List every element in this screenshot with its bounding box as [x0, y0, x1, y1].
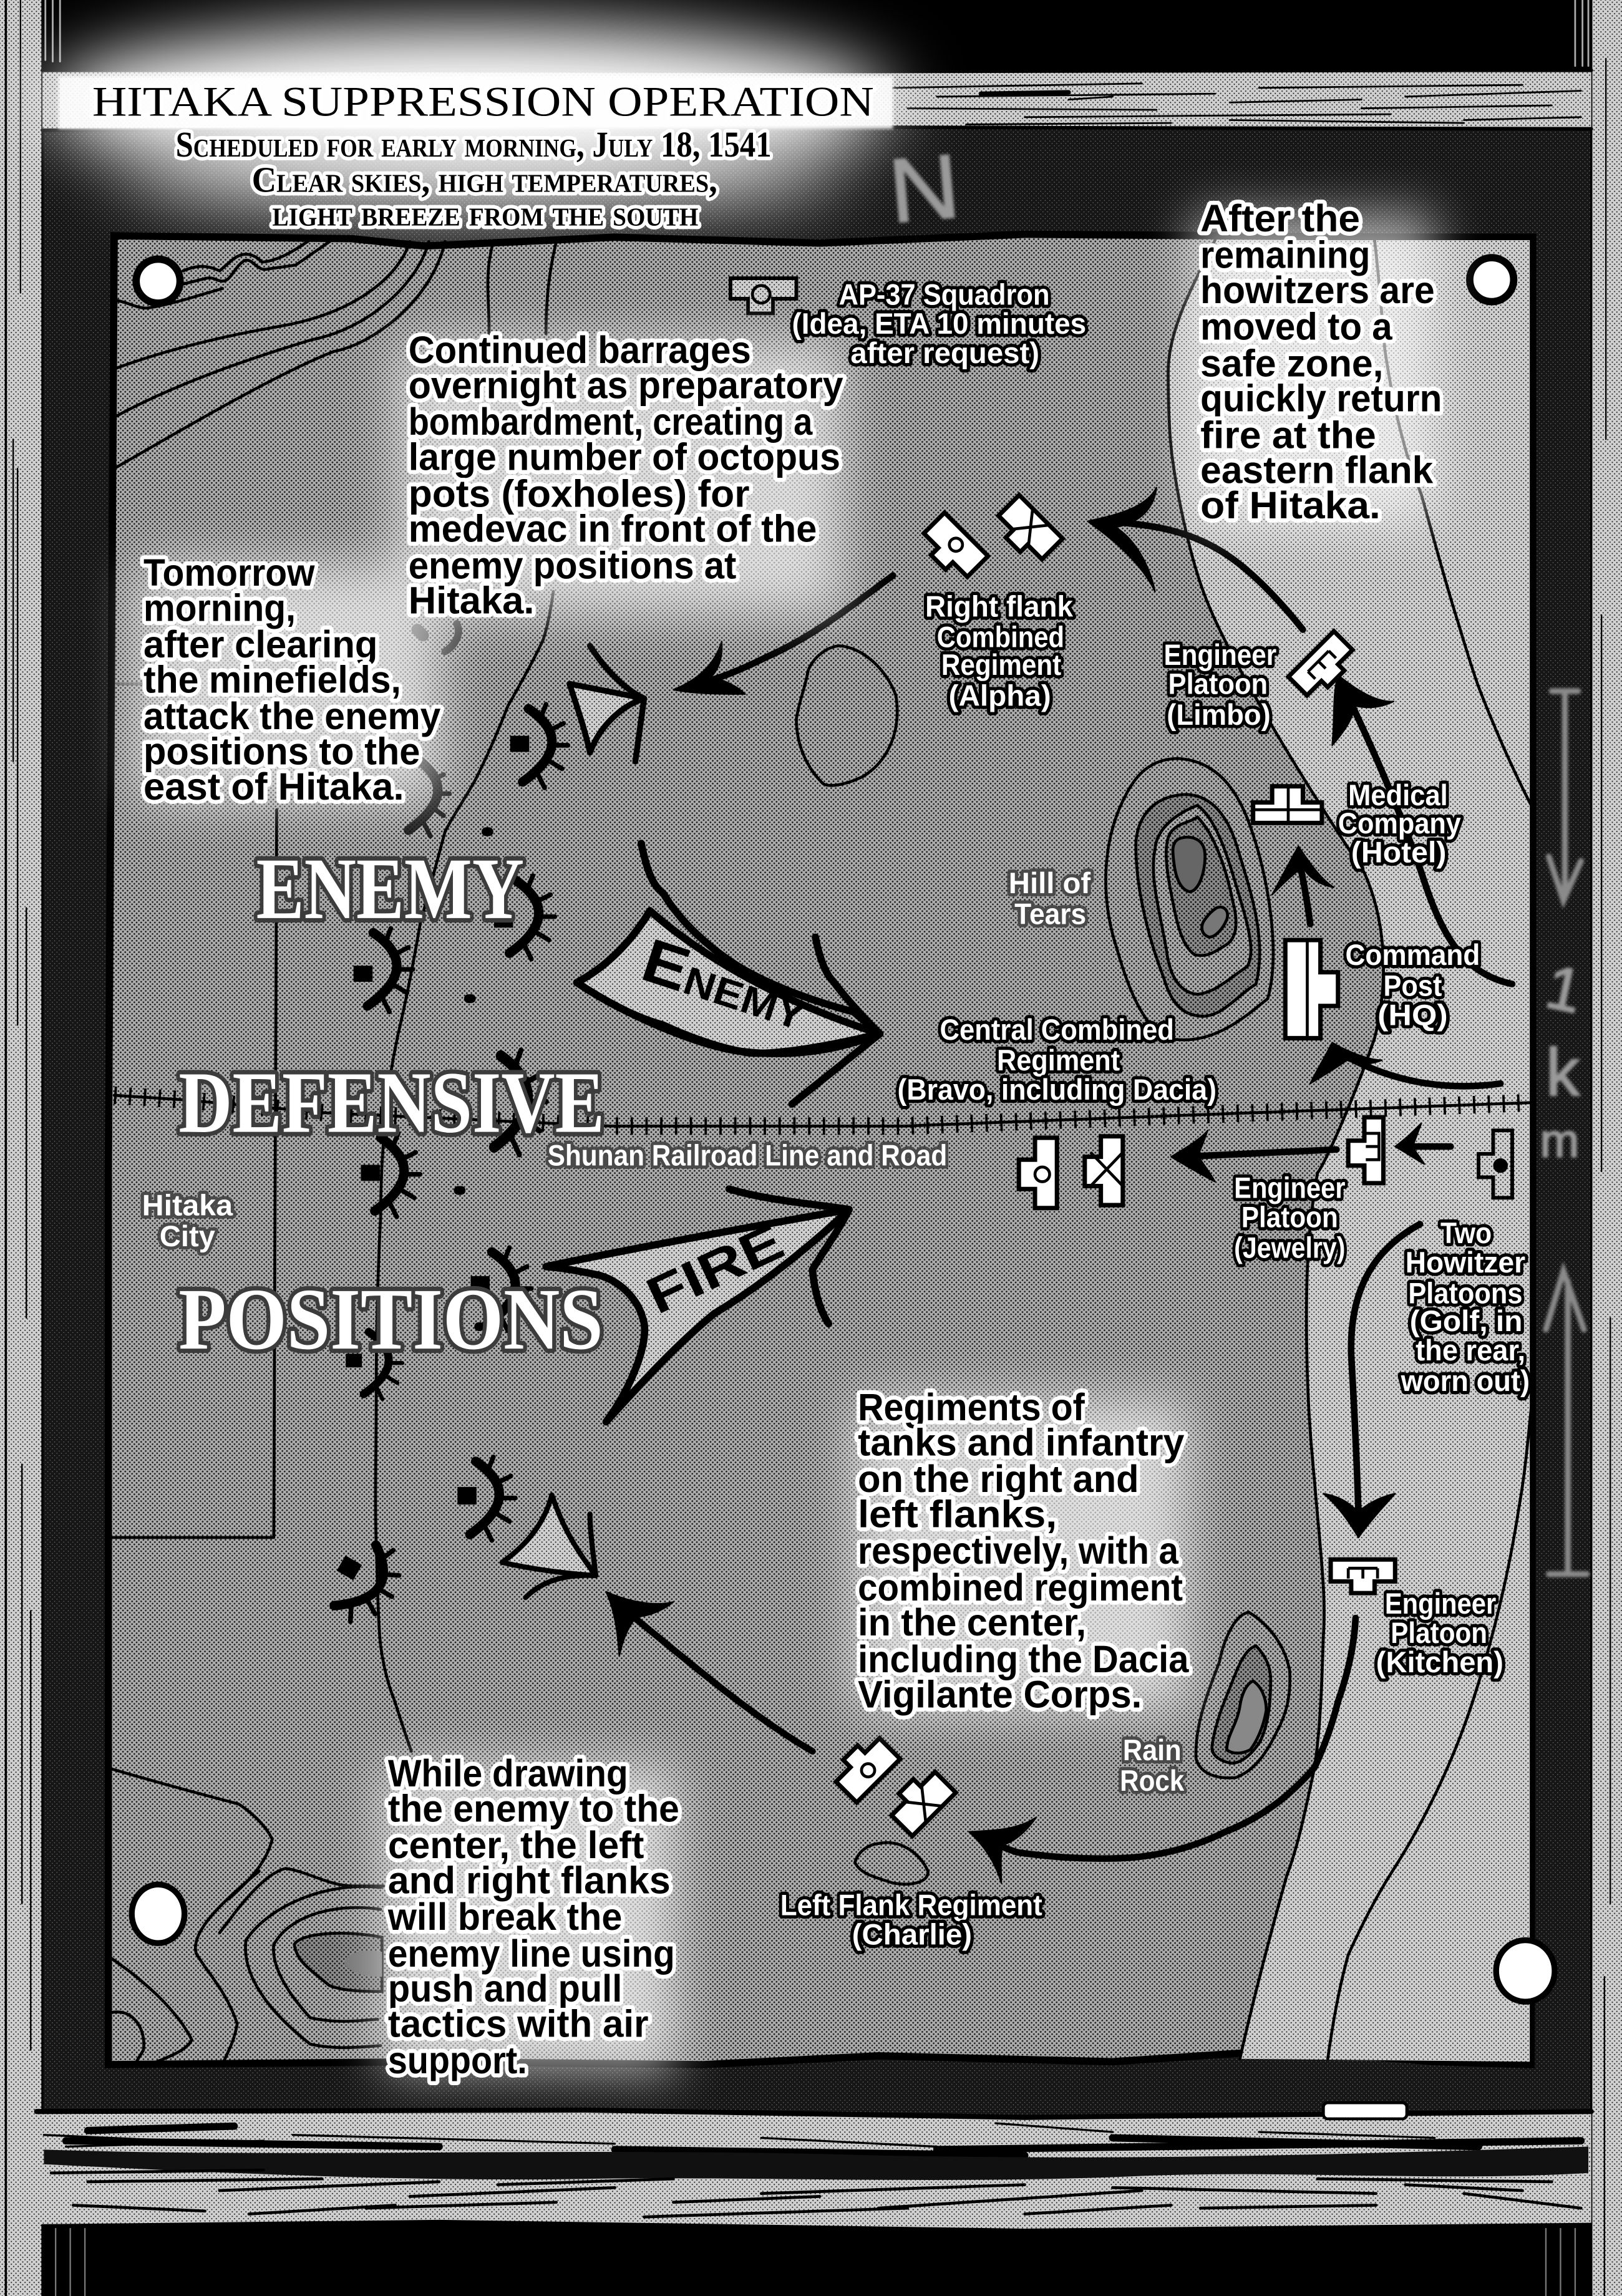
subtitle: schedule: Scheduled for early morning, July 18, 1541 [176, 124, 772, 165]
text block: regiment composition [858, 1386, 1189, 1715]
label: Rain Rock: Rock [1120, 1765, 1185, 1797]
text block: preparatory bombardment: bombardment, creating a [409, 400, 813, 443]
text block: push and pull tactics: the enemy to the [388, 1787, 679, 1829]
text block: regiment composition: tanks and infantry [858, 1421, 1184, 1463]
icon: right flank infantry unit [991, 495, 1062, 566]
text block: push and pull tactics: will break the [387, 1896, 622, 1938]
chalk ledge [37, 2110, 1591, 2229]
label: Right flank regiment [925, 590, 1074, 712]
label: Rain Rock [1120, 1734, 1185, 1797]
chalk scale: one kilometre: m [1540, 1115, 1579, 1167]
label: Engineer Platoon Jewelry: (Jewelry) [1234, 1232, 1345, 1264]
text block: howitzer return fire: fire at the [1200, 414, 1376, 456]
label: Hitaka City: Hitaka [142, 1189, 233, 1221]
left wooden post [0, 0, 42, 2296]
label: Rain Rock: Rain [1123, 1734, 1182, 1766]
big label: ENEMY: ENEMY [256, 841, 524, 937]
chalk scale: one kilometre: 1 [1540, 952, 1588, 1026]
eastern lowland [1168, 240, 1530, 2061]
text block: morning attack: Tomorrow [143, 551, 315, 594]
label: Engineer Platoon Limbo: Engineer [1164, 639, 1276, 671]
pin: bottom right [1496, 1940, 1555, 2002]
label: Hitaka City: City [160, 1220, 215, 1252]
icon: AP-37 squadron unit [731, 278, 797, 313]
chalk scale: one kilometre: k [1546, 1034, 1580, 1110]
label: Two Howitzer Platoons [1401, 1217, 1530, 1397]
label: Right flank regiment: Right flank [925, 590, 1074, 622]
icon: left flank infantry unit [885, 1765, 956, 1836]
text block: morning attack: positions to the [143, 730, 420, 772]
label: Command Post [1345, 939, 1480, 1031]
central small hill [797, 646, 897, 785]
text block: morning attack [143, 551, 440, 808]
label: Two Howitzer Platoons: Howitzer [1406, 1246, 1525, 1279]
text block: push and pull tactics: push and pull [388, 1967, 622, 2010]
label: Two Howitzer Platoons: the rear, [1416, 1334, 1525, 1367]
label: Two Howitzer Platoons: Platoons [1408, 1277, 1522, 1309]
icon: Jewelry engineer unit [1348, 1117, 1384, 1183]
Hitaka city boundary [111, 810, 277, 1538]
label: Central Combined Regiment: Regiment [997, 1044, 1120, 1077]
wood grain [66, 2126, 1581, 2156]
chalk scale: one kilometre [1540, 691, 1588, 1574]
label: Right flank regiment: (Alpha) [949, 680, 1051, 712]
label: Engineer Platoon Limbo [1164, 639, 1276, 731]
enemy positions: entrenchment markers [319, 624, 568, 1634]
text block: regiment composition: left flanks, [858, 1493, 1057, 1536]
text block: preparatory bombardment: Continued barrages [409, 329, 751, 371]
label: Engineer Platoon Kitchen: Platoon [1391, 1617, 1487, 1649]
west bank line [1168, 240, 1384, 2059]
banner word ENEMY: ENEMY [634, 926, 817, 1043]
label: AP-37 Squadron: AP-37 Squadron [839, 278, 1049, 311]
arrow: Jewelry to centre [1171, 1130, 1336, 1181]
text block: regiment composition: on the right and [858, 1458, 1139, 1500]
label: Two Howitzer Platoons: Two [1440, 1217, 1492, 1249]
label: Two Howitzer Platoons: worn out) [1401, 1365, 1530, 1397]
text block: preparatory bombardment: large number of octopus [409, 436, 840, 478]
map sheet [109, 235, 1533, 2065]
railroad line [114, 1095, 1532, 1126]
text block: regiment composition: including the Dacia [858, 1638, 1189, 1680]
contours: north-west [114, 239, 556, 468]
text block: regiment composition: combined regiment [858, 1566, 1183, 1609]
arrow: right flank to enemy [673, 576, 893, 694]
arrow: to HQ [1310, 1042, 1500, 1086]
text block: push and pull tactics: tactics with air [388, 2002, 649, 2045]
icon: howitzer unit [1479, 1130, 1512, 1198]
text block: morning attack: east of Hitaka. [143, 765, 404, 808]
text block: howitzer return fire: remaining [1200, 234, 1370, 276]
enemy front line [376, 591, 553, 1751]
arrow: HQ to Medical [1272, 846, 1334, 924]
label: Engineer Platoon Limbo: Platoon [1168, 668, 1268, 700]
left flank rock [855, 1843, 928, 1884]
label: Engineer Platoon Kitchen: (Kitchen) [1376, 1646, 1503, 1678]
text block: preparatory bombardment: overnight as preparatory [409, 364, 843, 407]
text block: regiment composition: respectively, with a [858, 1529, 1179, 1572]
text block: howitzer return fire [1200, 197, 1442, 526]
label: Hill of Tears [1009, 867, 1091, 930]
subtitle: wind: light breeze from the south [272, 193, 698, 234]
text block: preparatory bombardment: pots (foxholes) for [409, 472, 749, 515]
label: Command Post: (HQ) [1377, 999, 1448, 1031]
label: Hill of Tears: Hill of [1009, 867, 1091, 899]
right wooden post [1591, 0, 1622, 2296]
label: AP-37 Squadron: after request) [850, 337, 1039, 369]
text block: preparatory bombardment: medevac in front of the [409, 508, 817, 550]
text block: howitzer return fire: moved to a [1200, 306, 1393, 348]
text block: howitzer return fire: quickly return [1200, 377, 1442, 420]
text block: howitzer return fire: After the [1200, 197, 1360, 240]
label: Engineer Platoon Jewelry: Platoon [1241, 1201, 1338, 1233]
text block: howitzer return fire: safe zone, [1200, 342, 1384, 384]
label: Left Flank Regiment: Left Flank Regiment [780, 1889, 1042, 1922]
text block: howitzer return fire: of Hitaka. [1200, 484, 1381, 526]
label: Central Combined Regiment [897, 1014, 1216, 1106]
arrow: fire banner [546, 1189, 849, 1422]
label: Right flank regiment: Combined [937, 621, 1064, 654]
title block [92, 77, 874, 234]
Rain Rock contours [1196, 1612, 1290, 1778]
label: Medical Company: Company [1338, 807, 1461, 840]
text block: push and pull tactics: While drawing [388, 1752, 628, 1795]
arrow: left flank to enemy [606, 1592, 812, 1751]
east bank line, north [1374, 240, 1532, 805]
top beam [42, 70, 1591, 132]
big label: POSITIONS: POSITIONS [178, 1271, 603, 1368]
label: Two Howitzer Platoons: (Golf, in [1410, 1305, 1522, 1337]
label: Command Post: Post [1384, 969, 1442, 1002]
arrow: Kitchen to left flank [969, 1618, 1356, 1883]
label: Command Post: Command [1345, 939, 1480, 971]
label: Medical Company: (Hotel) [1351, 836, 1446, 869]
arrow: enemy south chevron [502, 1495, 596, 1597]
label: Left Flank Regiment [780, 1889, 1042, 1951]
label: AP-37 Squadron: (Idea, ETA 10 minutes [792, 308, 1086, 340]
label: AP-37 Squadron [792, 278, 1086, 369]
text block: push and pull tactics: enemy line using [388, 1932, 675, 1975]
label: railroad: Shunan Railroad Line and Road [548, 1140, 947, 1172]
label: Engineer Platoon Jewelry: Engineer [1234, 1171, 1345, 1204]
big label: DEFENSIVE: DEFENSIVE [178, 1055, 605, 1151]
text block: push and pull tactics: support. [388, 2039, 527, 2081]
text block: preparatory bombardment: enemy positions at [409, 544, 736, 586]
chalk compass letter N: N [885, 135, 964, 242]
pin: top left [136, 259, 180, 303]
text block: push and pull tactics: center, the left [388, 1824, 644, 1866]
label: Engineer Platoon Kitchen [1376, 1587, 1503, 1678]
icon: medical unit [1253, 787, 1322, 823]
text block: morning attack: attack the enemy [143, 695, 440, 737]
icon: chalk stick [1323, 2103, 1407, 2119]
panel: map [109, 235, 1533, 2065]
label: Left Flank Regiment: (Charlie) [852, 1919, 972, 1951]
label: Hitaka City [142, 1189, 233, 1252]
label: Engineer Platoon Kitchen: Engineer [1385, 1587, 1496, 1620]
text block: push and pull tactics [387, 1752, 679, 2081]
glow: text block backgrounds [139, 212, 1435, 2073]
text block: howitzer return fire: eastern flank [1200, 449, 1433, 492]
icon: left flank tank unit [828, 1731, 900, 1803]
east bank line, south [1328, 1394, 1533, 2059]
label: Medical Company [1338, 779, 1461, 869]
text block: regiment composition: Vigilante Corps. [858, 1673, 1142, 1715]
label: Central Combined Regiment: (Bravo, including Dacia) [897, 1073, 1216, 1106]
icon: Kitchen engineer unit [1331, 1559, 1395, 1593]
stub line near morning text [117, 683, 143, 684]
label: Central Combined Regiment: Central Combined [940, 1014, 1174, 1046]
arrow: howitzers to right flank [1088, 488, 1303, 629]
arrow: enemy attack banner [577, 843, 880, 1104]
subtitle: weather: Clear skies, high temperatures, [252, 160, 717, 200]
icon: right flank tank unit [916, 513, 988, 584]
icon: central tank unit [1019, 1138, 1057, 1208]
contours: south-west [109, 1769, 384, 2065]
label: Engineer Platoon Jewelry [1234, 1171, 1345, 1264]
text block: push and pull tactics: and right flanks [388, 1859, 671, 1901]
text block: morning attack: after clearing [143, 623, 377, 666]
arrow: howitzers to Kitchen [1323, 1224, 1420, 1538]
upper post ends [46, 0, 1588, 66]
arrow: to Limbo [1332, 675, 1512, 984]
arrow: howitzers to Jewelry [1395, 1123, 1450, 1164]
label: Hill of Tears: Tears [1014, 898, 1086, 930]
text block: howitzer return fire: howitzers are [1200, 269, 1435, 311]
icon: central infantry unit [1085, 1136, 1123, 1205]
pin: bottom left [132, 1884, 185, 1943]
label: Medical Company: Medical [1348, 779, 1448, 811]
icon: command post [1285, 940, 1338, 1038]
text block: preparatory bombardment [409, 329, 843, 622]
label: Right flank regiment: Regiment [941, 649, 1062, 681]
pin: top right [1470, 258, 1513, 302]
arrow: enemy north chevron [570, 646, 644, 762]
glow: title [44, 26, 893, 220]
text block: regiment composition: Regiments of [858, 1386, 1085, 1428]
icon: Limbo engineer unit [1288, 631, 1359, 702]
text block: morning attack: morning, [143, 586, 296, 629]
text block: regiment composition: in the center, [858, 1601, 1086, 1644]
title: HITAKA SUPPRESSION OPERATION [92, 77, 874, 125]
banner word FIRE: FIRE [638, 1213, 792, 1325]
text block: preparatory bombardment: Hitaka. [409, 579, 534, 622]
label: Engineer Platoon Limbo: (Limbo) [1167, 699, 1271, 731]
text block: morning attack: the minefields, [143, 658, 401, 700]
lower post shadows [56, 2229, 1575, 2296]
Hill of Tears contours [1106, 758, 1273, 1040]
